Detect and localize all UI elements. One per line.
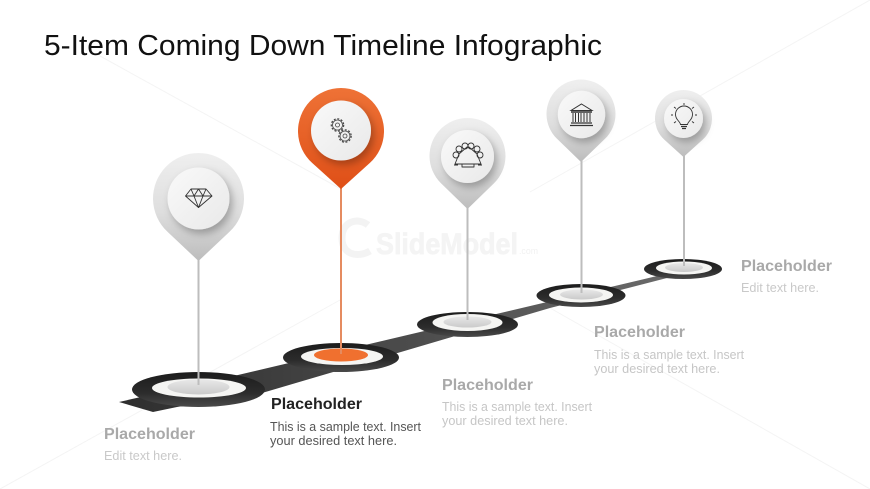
milestone 2 (highlighted) (283, 88, 399, 372)
label 2: your desired text here. (270, 434, 397, 448)
ring 2 (283, 343, 399, 372)
label 3: This is a sample text. Insert (442, 400, 593, 414)
ring 5 (644, 259, 722, 279)
watermark: SlideModel: .com (519, 246, 538, 256)
stem 1 (198, 258, 200, 385)
label 4: Placeholder (594, 324, 685, 341)
pin 1 inner disc (168, 168, 230, 230)
label 1: Edit text here. (104, 449, 182, 463)
pin 3 inner disc (441, 130, 494, 183)
stem 3 (466, 206, 468, 320)
timeline road (119, 276, 667, 412)
icon: bank building (570, 104, 593, 126)
milestone 3 (417, 118, 518, 337)
label 5 (741, 258, 832, 295)
label 1: Placeholder (104, 426, 195, 443)
stem 2 (340, 186, 342, 354)
label 2 (270, 396, 422, 448)
title: 5-Item Coming Down Timeline Infographic (44, 30, 602, 62)
watermark: SlideModel: SlideModel (376, 228, 518, 261)
ring 1 (132, 372, 265, 407)
watermark: SlideModel (342, 221, 538, 261)
label 1 (104, 426, 195, 463)
label 5: Edit text here. (741, 281, 819, 295)
ring 4 (536, 284, 626, 307)
pin 2 (298, 88, 384, 189)
pin 5 inner disc (664, 99, 703, 138)
pin 4 inner disc (558, 91, 605, 138)
stem 4 (580, 159, 582, 293)
label 3: Placeholder (442, 377, 533, 394)
label 3: your desired text here. (442, 414, 568, 428)
pin 3 (430, 118, 506, 209)
label 2: This is a sample text. Insert (270, 420, 422, 434)
label 4 (594, 324, 745, 376)
label 2: Placeholder (271, 396, 362, 413)
milestone 1 (132, 153, 265, 407)
label 4: This is a sample text. Insert (594, 348, 745, 362)
pin 2 inner disc (311, 100, 371, 160)
label 3 (442, 377, 593, 428)
pin 4 (546, 80, 616, 162)
pin 5 (655, 90, 712, 157)
icon: meeting table (453, 143, 483, 167)
milestone 4 (536, 80, 626, 307)
label 4: your desired text here. (594, 362, 720, 376)
milestone 5 (644, 90, 722, 279)
icon: light bulb (671, 103, 697, 128)
pin 1 (153, 153, 244, 261)
label 5: Placeholder (741, 258, 832, 275)
ring 3 (417, 312, 518, 337)
icon: diamond (186, 189, 212, 208)
icon: gears (331, 119, 351, 142)
stem 5 (683, 154, 685, 266)
